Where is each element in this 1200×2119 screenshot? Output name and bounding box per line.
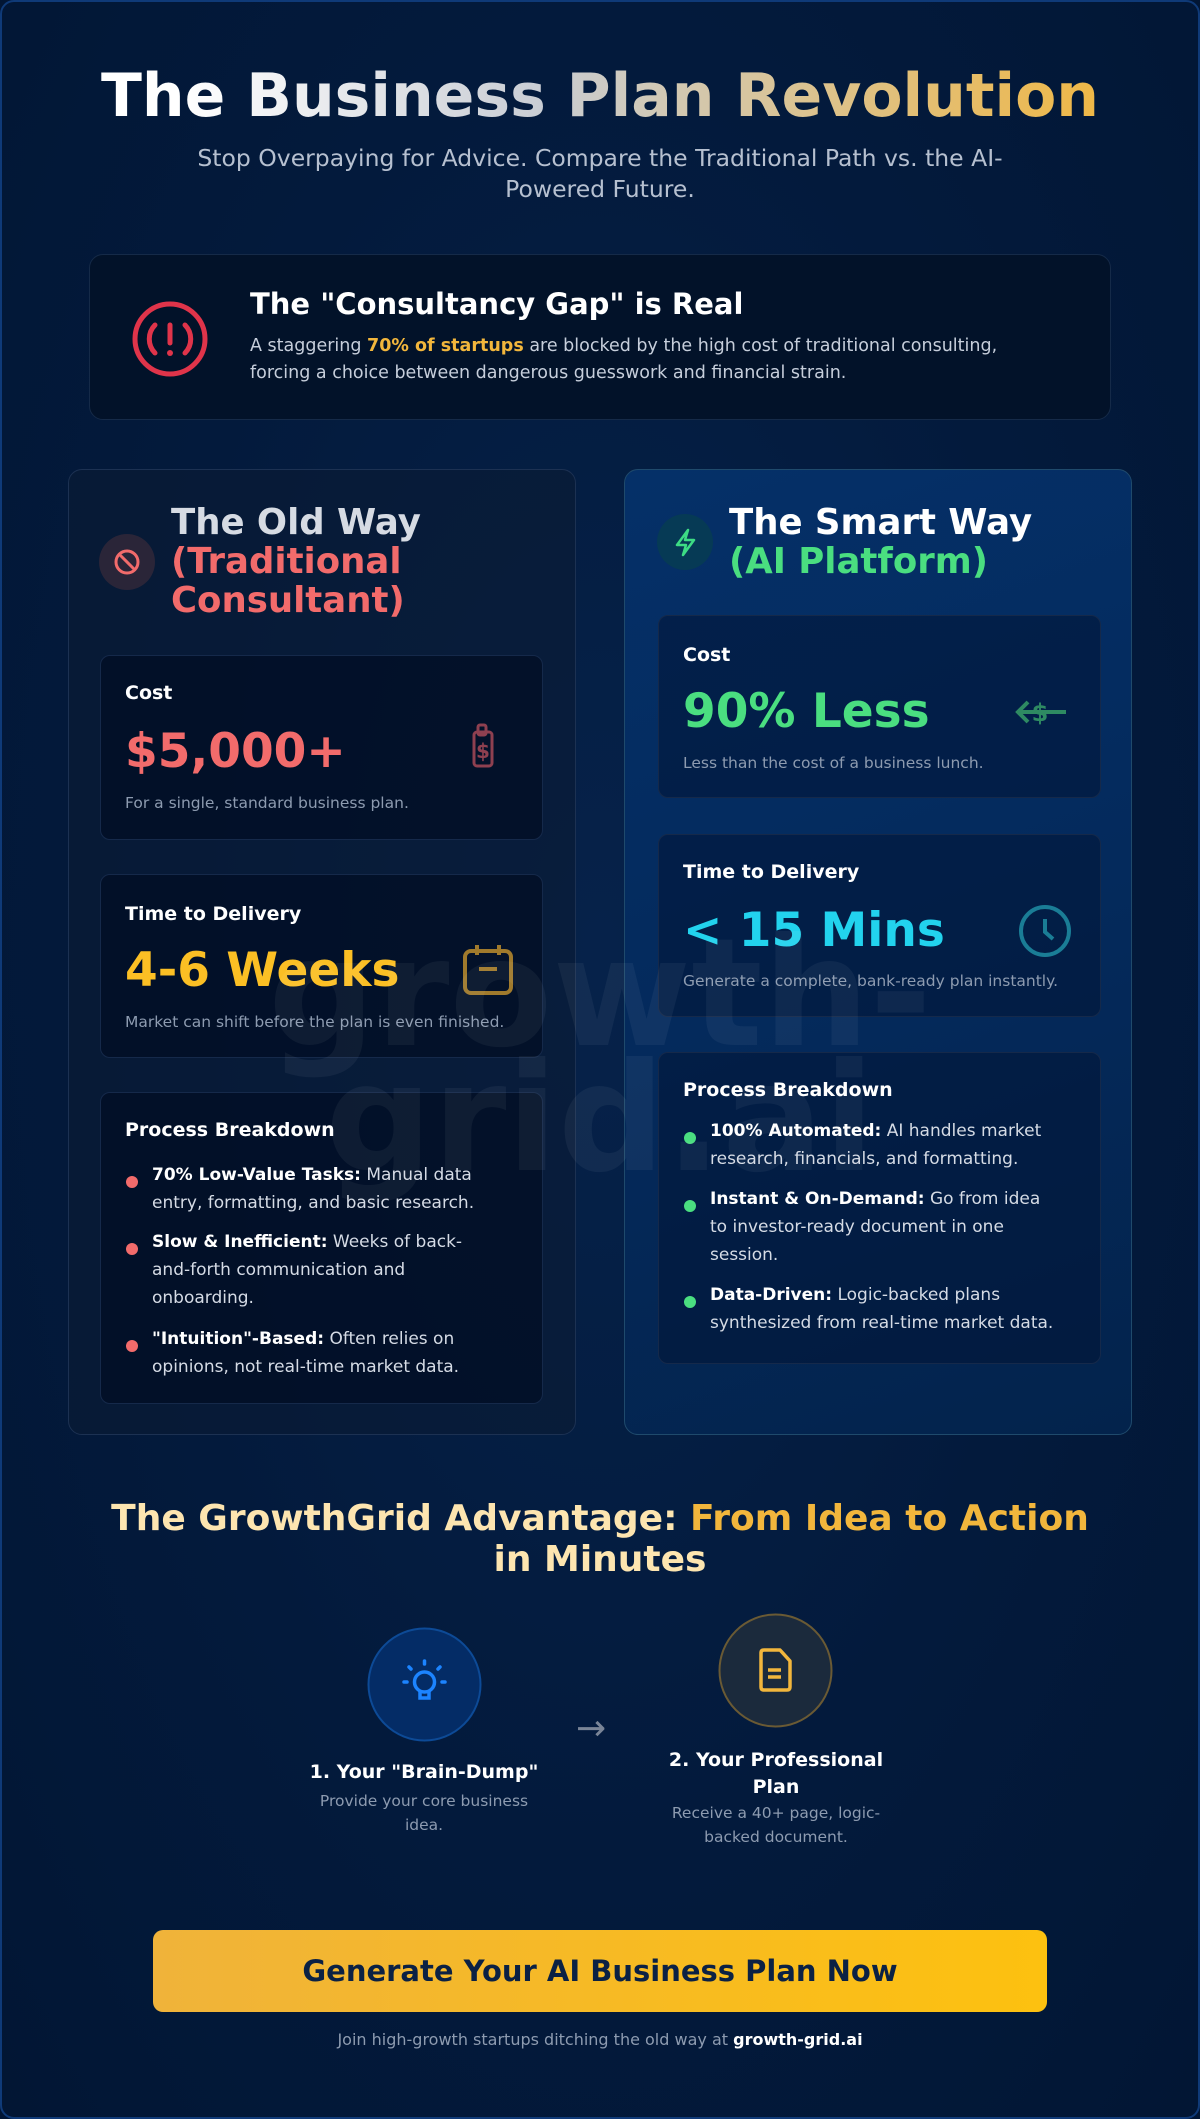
card: time: < 15 Mins: [683, 903, 945, 958]
card: cost: Less than the cost of a business lunch.: [683, 754, 984, 772]
heading: [171, 502, 421, 621]
card: process: [658, 1052, 1101, 1364]
heading: (AI Platform): [729, 541, 988, 582]
step 2: [669, 1614, 883, 1846]
footer: Join high-growth startups ditching the old way at growth-grid.ai: [337, 2030, 863, 2049]
CTA button: [153, 1930, 1047, 2012]
CTA button: Generate Your AI Business Plan Now: [302, 1954, 898, 1988]
card: cost: For a single, standard business plan.: [125, 794, 409, 812]
title: The Business Plan Revolution: [101, 61, 1099, 131]
icon: clock: [1019, 905, 1071, 957]
icon: document: [718, 1614, 832, 1728]
heading: The Smart Way: [729, 502, 1032, 543]
icon: money: $: [476, 739, 490, 763]
icon: down dollar: [1015, 699, 1066, 727]
heading: (Traditional: [171, 541, 402, 582]
icon: money: [472, 724, 494, 768]
step 1: 1. Your "Brain-Dump": [310, 1761, 538, 1783]
arrow: →: [576, 1708, 606, 1749]
body text: A staggering 70% of startups are blocked by the high cost of traditional consulting, forcing a choice between dangerous guesswork and financial strain.: [250, 336, 997, 383]
card: process: Process Breakdown: [683, 1079, 893, 1101]
heading: Consultant): [171, 580, 405, 621]
icon: bolt: [657, 514, 713, 570]
card: process: "Intuition"-Based: Often relies on opinions, not real-time market data.: [152, 1329, 459, 1377]
icon: lightbulb: [368, 1628, 482, 1742]
card: time: [658, 834, 1101, 1017]
icon: calendar: [463, 945, 513, 995]
heading: The Old Way: [171, 502, 421, 543]
card: cost: [658, 615, 1101, 798]
section heading: advantage: [111, 1498, 1089, 1580]
card: time: Generate a complete, bank-ready plan instantly.: [683, 972, 1058, 990]
card: process: Instant & On-Demand: Go from idea to investor-ready document in one session.: [710, 1189, 1040, 1265]
card: process: Data-Driven: Logic-backed plans synthesized from real-time market data.: [710, 1285, 1053, 1333]
card: time: [100, 874, 543, 1058]
icon: ban: [99, 534, 155, 590]
card: process: 100% Automated: AI handles market research, financials, and formatting.: [710, 1121, 1041, 1169]
card: process: Process Breakdown: [125, 1119, 335, 1141]
card: cost: 90% Less: [683, 684, 930, 739]
panel: smart way: [624, 469, 1132, 1435]
heading: [729, 502, 1032, 582]
card: time: Time to Delivery: [125, 903, 301, 925]
step 2: 2. Your Professional Plan: [669, 1749, 883, 1798]
watermark: [268, 907, 932, 1206]
card: process: 70% Low-Value Tasks: Manual data entry, formatting, and basic research.: [152, 1165, 474, 1213]
watermark: grid.ai: [325, 1032, 875, 1206]
icon: alert: [132, 302, 208, 376]
card: cost: Cost: [683, 644, 730, 666]
section heading: advantage: in Minutes: [494, 1539, 706, 1580]
card: cost: $5,000+: [125, 724, 346, 779]
step 2: Receive a 40+ page, logic-backed document.: [672, 1804, 880, 1846]
subtitle: Stop Overpaying for Advice. Compare the Traditional Path vs. the AI-Powered Future.: [197, 144, 1003, 203]
card: cost: Cost: [125, 682, 172, 704]
card: time: Time to Delivery: [683, 861, 859, 883]
card: process: [100, 1092, 543, 1404]
step 1: [310, 1628, 538, 1834]
section heading: advantage: The GrowthGrid Advantage: From Idea to Action: [111, 1498, 1089, 1539]
card: process: Slow & Inefficient: Weeks of back-and-forth communication and onboarding.: [152, 1232, 462, 1308]
panel: old way: [68, 469, 576, 1435]
card: time: 4-6 Weeks: [125, 943, 399, 998]
step 1: Provide your core business idea.: [320, 1792, 528, 1834]
heading: The "Consultancy Gap" is Real: [250, 287, 743, 321]
watermark: growth-: [268, 907, 932, 1081]
callout: consultancy gap: [89, 254, 1111, 420]
card: time: Market can shift before the plan is even finished.: [125, 1013, 504, 1031]
card: cost: [100, 655, 543, 840]
icon: down dollar: $: [1032, 699, 1048, 727]
